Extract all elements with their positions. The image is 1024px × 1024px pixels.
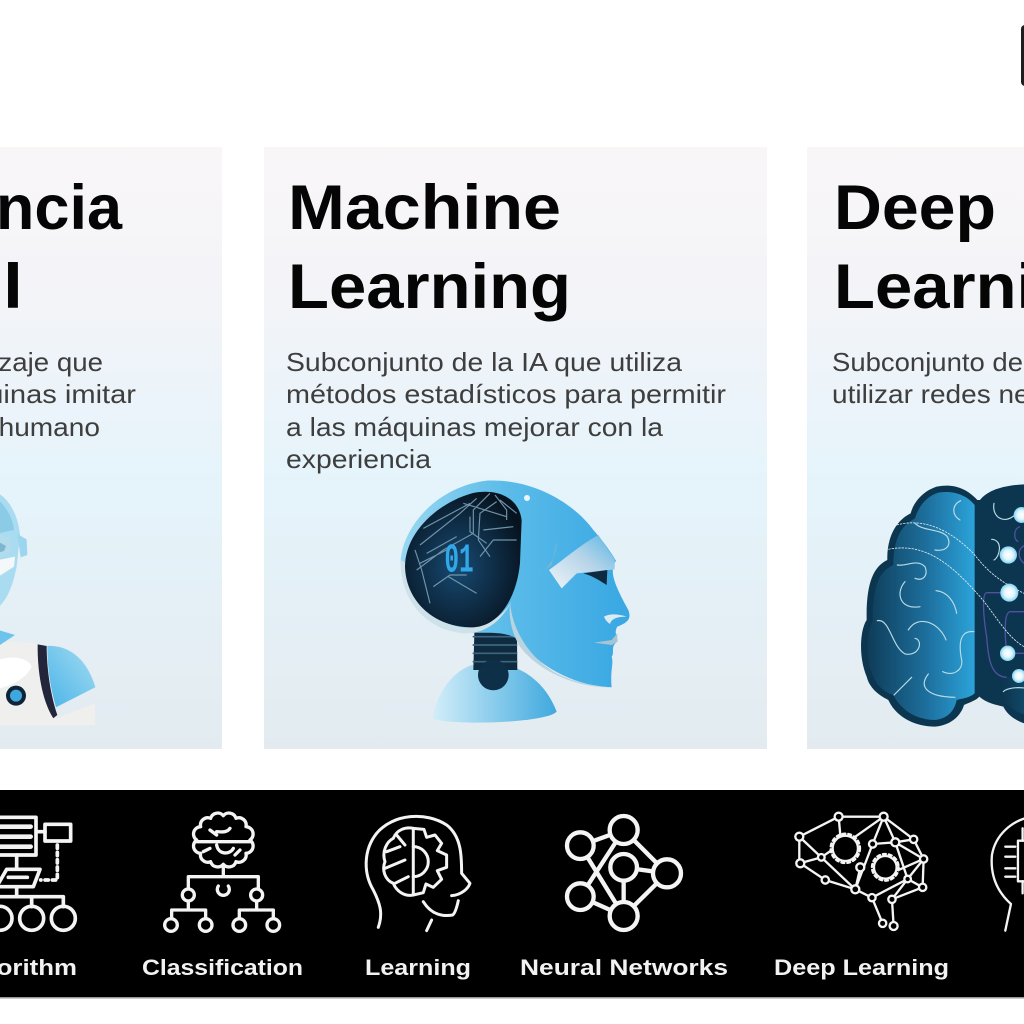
icon: humanoid robot xyxy=(0,493,95,725)
text block: Machine Learning description: Subconjunto de la IA que utiliza xyxy=(286,347,683,377)
heading: Inteligencia Artificial: l xyxy=(3,252,23,322)
panel: Machine Learning xyxy=(264,147,767,749)
icon: algorithm flowchart xyxy=(0,817,75,930)
label: Learning: Learning xyxy=(365,955,471,980)
label: Classification: Classification xyxy=(142,955,303,980)
icon: head with chip xyxy=(992,817,1024,931)
circuit traces xyxy=(415,493,517,603)
text block: Inteligencia Artificial description xyxy=(0,347,136,442)
text block: Deep Learning description: Subconjunto de xyxy=(832,347,1023,377)
panel: Deep Learning xyxy=(807,147,1024,749)
heading: Machine Learning: Learning xyxy=(288,252,571,322)
text block: Machine Learning description: métodos estadísticos para permitir xyxy=(286,379,726,409)
icon: neural network nodes xyxy=(567,816,681,930)
panel: Inteligencia Artificial xyxy=(0,147,222,749)
label: Neural Networks: Neural Networks xyxy=(520,955,728,980)
text block: Machine Learning description: experiencia xyxy=(286,444,432,474)
icon: head with brain and gear xyxy=(366,816,470,931)
icon: robot head with circuit brain xyxy=(401,481,629,723)
heading: Machine Learning xyxy=(288,173,571,322)
icon: classification brain tree xyxy=(165,813,280,931)
text block: Deep Learning description xyxy=(832,347,1024,409)
heading: Inteligencia Artificial xyxy=(0,173,123,322)
heading: Deep Learning xyxy=(834,173,1024,322)
icon: deep learning brain mesh xyxy=(795,813,927,930)
text block: Machine Learning description: a las máquinas mejorar con la xyxy=(286,412,664,442)
top right dark tab xyxy=(1021,25,1024,86)
heading: Deep Learning: Deep xyxy=(834,173,996,243)
text block: Machine Learning description xyxy=(286,347,726,474)
label: Deep Learning: Deep Learning xyxy=(774,955,949,980)
heading: Machine Learning: Machine xyxy=(288,173,561,243)
binary digits: 01 xyxy=(444,539,474,585)
icon: brain with neural nodes xyxy=(861,484,1024,727)
icon bar xyxy=(0,790,1024,998)
